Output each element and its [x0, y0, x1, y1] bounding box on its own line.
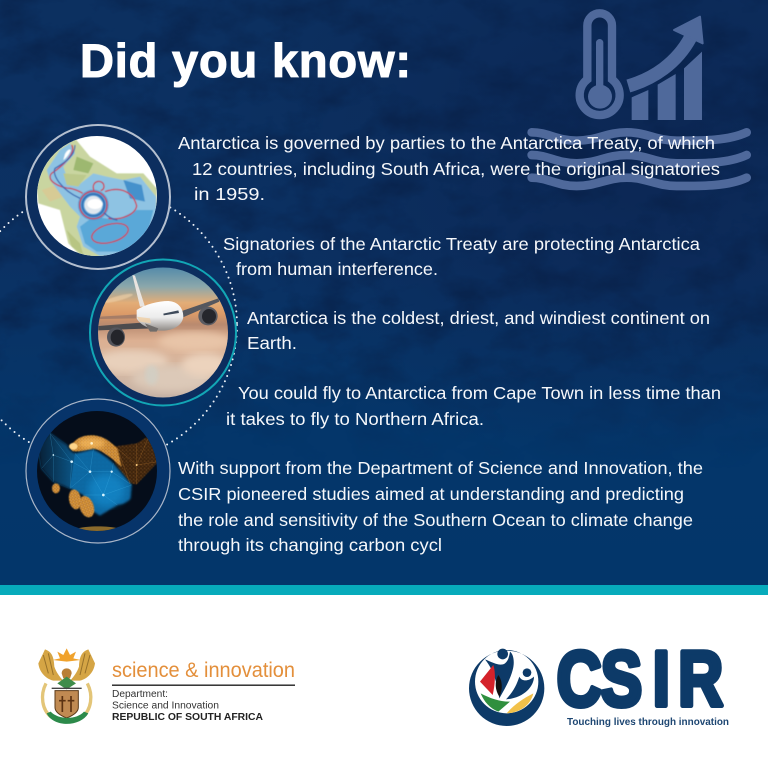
text block: protection from human interference: Signatories of the Antarctic Treaty are protecting Antarctica — [223, 234, 700, 254]
text block: coldest, driest, windiest: Antarctica is the coldest, driest, and windiest continent on — [247, 308, 710, 328]
text block: CSIR Southern Ocean studies: through its changing carbon cycl — [178, 535, 442, 555]
logo text: Department of Science and Innovation: REPUBLIC OF SOUTH AFRICA — [112, 711, 263, 723]
panel: white footer — [0, 595, 768, 768]
text block: Antarctic Treaty signatories: Antarctica is governed by parties to the Antarctica Treaty, of which — [178, 133, 715, 153]
text block: CSIR Southern Ocean studies: With support from the Department of Science and Innovation, the — [178, 458, 703, 478]
text block: CSIR Southern Ocean studies: CSIR pioneered studies aimed at understanding and predicting — [178, 484, 684, 504]
logo text: Department of Science and Innovation: Department: — [112, 689, 168, 700]
text block: CSIR Southern Ocean studies — [178, 458, 703, 555]
text block: Antarctic Treaty signatories — [178, 133, 720, 204]
logo text: CSIR wordmark and tagline: Touching lives through innovation — [567, 717, 729, 728]
text block: CSIR Southern Ocean studies: the role and sensitivity of the Southern Ocean to climate change — [178, 510, 693, 530]
text block: coldest, driest, windiest — [247, 308, 710, 353]
text block: protection from human interference: from human interference. — [236, 259, 438, 279]
dotted orbit ring — [0, 188, 237, 462]
logo text: Department of Science and Innovation: Science and Innovation — [112, 700, 219, 712]
text block: Antarctic Treaty signatories: in 1959. — [194, 184, 265, 204]
icon: South African coat of arms — [38, 648, 95, 724]
image: ocean current map — [26, 125, 170, 269]
icon: CSIR emblem — [469, 649, 544, 726]
text block: flying from Cape Town: You could fly to Antarctica from Cape Town in less time than — [238, 383, 721, 403]
text block: coldest, driest, windiest: Earth. — [247, 333, 297, 353]
logo text: Department of Science and Innovation: science & innovation — [112, 658, 295, 682]
panel: dark blue textured background — [0, 0, 768, 586]
logo text: CSIR wordmark and tagline: CSIR — [557, 635, 723, 722]
image: glowing digital handshake — [26, 399, 170, 543]
text block: protection from human interference — [223, 234, 700, 279]
teal divider band — [0, 585, 768, 595]
text block: Antarctic Treaty signatories: 12 countries, including South Africa, were the original signatories — [192, 159, 720, 179]
logo text: Department of Science and Innovation — [112, 658, 295, 723]
text block: flying from Cape Town: it takes to fly to Northern Africa. — [226, 409, 484, 429]
title: Did you know: — [80, 34, 411, 87]
icon: thermometer, rising chart and waves — [532, 13, 747, 186]
image: aeroplane above the clouds — [90, 260, 236, 406]
text block: flying from Cape Town — [226, 383, 721, 429]
